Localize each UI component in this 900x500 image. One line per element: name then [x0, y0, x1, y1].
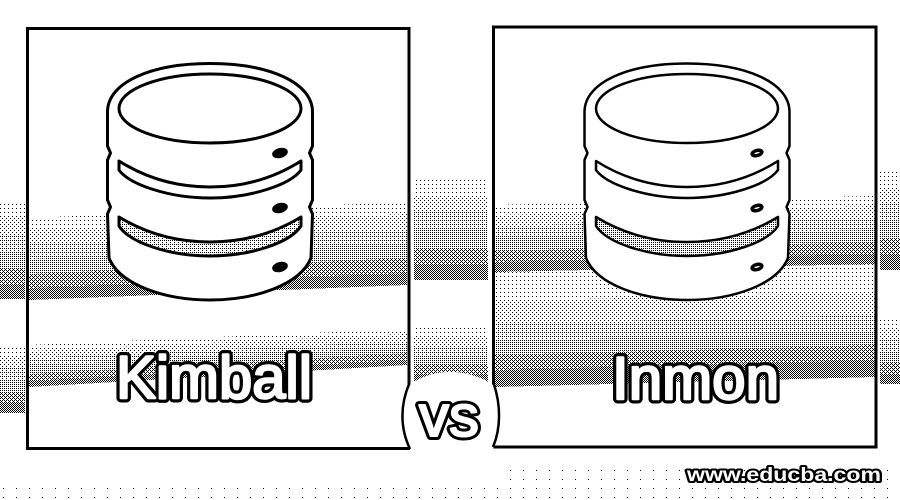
panel: Inmon frame	[493, 27, 876, 447]
vs badge: vs	[419, 384, 479, 449]
heading: Inmon: Inmon	[612, 345, 779, 412]
heading: Inmon: Inmon	[612, 345, 779, 412]
panel: Kimball frame	[28, 28, 410, 448]
icon: Inmon database cylinder	[584, 64, 790, 300]
icon: Kimball database cylinder	[108, 64, 312, 300]
heading: Kimball: Kimball	[116, 344, 312, 411]
vs badge	[402, 372, 499, 449]
heading: Kimball: Kimball	[116, 344, 312, 411]
website credit: www.educba.com	[686, 465, 881, 486]
dotted background bands	[0, 172, 900, 500]
vs badge: vs	[419, 384, 479, 449]
